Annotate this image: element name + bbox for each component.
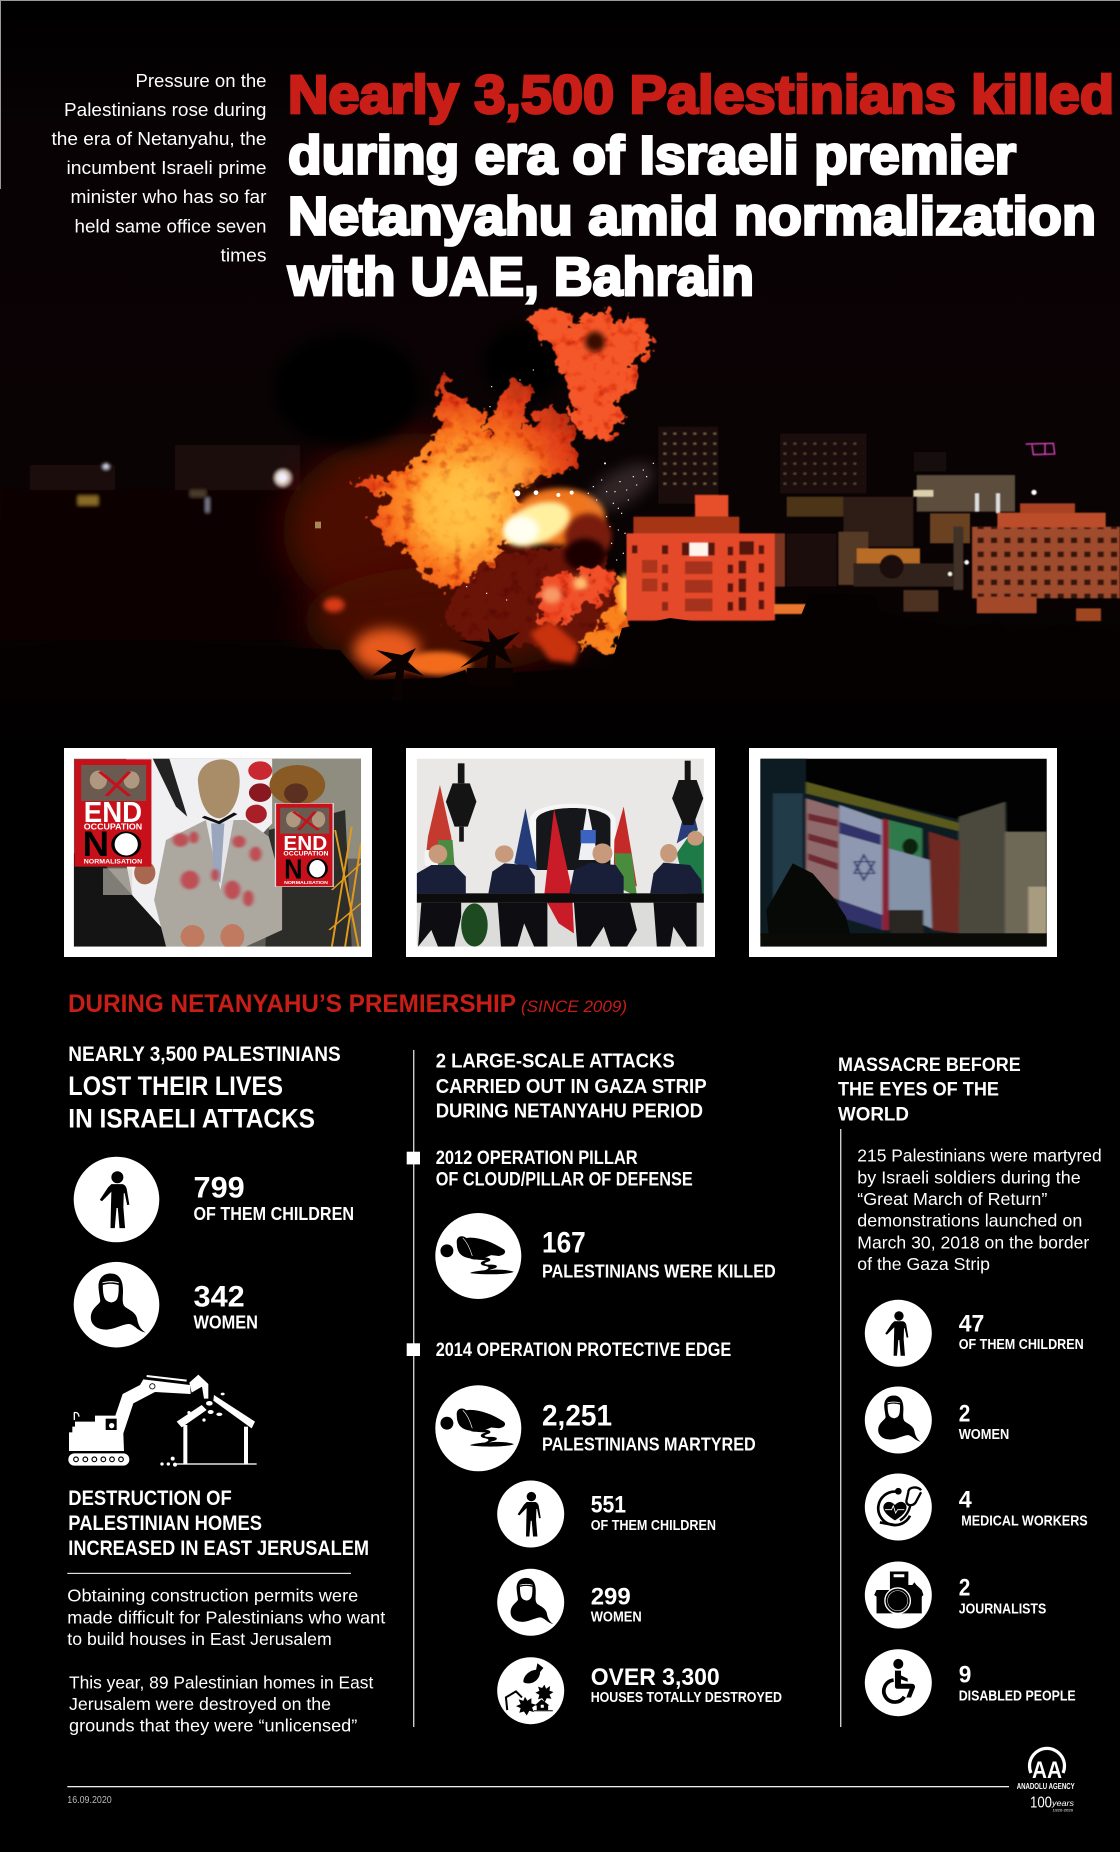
stat: houses destroyed: HOUSES TOTALLY DESTROYED xyxy=(591,1690,782,1706)
text block: Great March of Return: of the Gaza Strip xyxy=(857,1254,990,1274)
burning building xyxy=(627,533,775,621)
stat: 551 children: OF THEM CHILDREN xyxy=(591,1518,716,1534)
photo: protest with Netanyahu mask xyxy=(64,748,372,957)
intro text: times xyxy=(220,246,266,266)
stat: 167 killed: 167 xyxy=(542,1227,586,1260)
heading xyxy=(68,1042,341,1134)
date: 16.09.2020 xyxy=(67,1794,112,1806)
stat: 2,251 martyred: 2,251 xyxy=(542,1399,612,1432)
palm silhouettes xyxy=(372,628,520,700)
city and burning building xyxy=(627,427,1120,621)
stat: women: WOMEN xyxy=(194,1313,258,1333)
heading: MASSACRE BEFORE xyxy=(838,1054,1021,1076)
title: Netanyahu amid normalization xyxy=(288,186,1096,246)
foreground silhouette xyxy=(0,593,1120,740)
photo: protest with Netanyahu mask: OCCUPATION xyxy=(84,822,142,831)
footer xyxy=(67,1748,1075,1813)
heading: NEARLY 3,500 PALESTINIANS xyxy=(68,1042,341,1066)
subheading: 2012 xyxy=(436,1148,693,1190)
photo: protest with Netanyahu mask: N xyxy=(82,824,109,864)
text block: permits: Jerusalem were destroyed on the xyxy=(69,1694,331,1714)
text block: permits: This year, 89 Palestinian homes in East xyxy=(69,1672,373,1692)
text block: Great March of Return: “Great March of Return” xyxy=(857,1189,1047,1209)
text block: permits xyxy=(67,1585,385,1736)
logo: Anadolu Agency: AA xyxy=(1032,1757,1062,1784)
heading: destruction of homes xyxy=(68,1487,369,1560)
title: with UAE, Bahrain xyxy=(287,247,754,307)
hero photo: explosion over Gaza at night xyxy=(0,0,1120,748)
stat: 167 killed xyxy=(435,1213,776,1299)
subheading: 2012: 2012 OPERATION PILLAR xyxy=(436,1148,638,1169)
stat: 299 women xyxy=(497,1569,642,1636)
photo: protest with Netanyahu mask: NORMALISATION xyxy=(284,880,328,885)
heading: THE EYES OF THE xyxy=(838,1079,999,1101)
logo: Anadolu Agency: 1920-2020 xyxy=(1053,1809,1073,1813)
stat: children: 799 xyxy=(194,1172,245,1205)
stat: 4 medical workers: MEDICAL WORKERS xyxy=(961,1513,1088,1529)
text block: Great March of Return: 215 Palestinians were martyred xyxy=(857,1145,1102,1165)
stat: 2,251 martyred: PALESTINIANS MARTYRED xyxy=(542,1434,756,1455)
photo: protest with Netanyahu mask: N xyxy=(284,854,303,885)
section heading: (SINCE 2009) xyxy=(521,997,627,1016)
stat: 2 journalists xyxy=(865,1562,1047,1628)
sparks xyxy=(466,369,671,613)
title: during era of Israeli premier xyxy=(288,126,1016,186)
text block: permits: made difficult for Palestinians who want xyxy=(67,1607,385,1627)
icon: excavator demolishing house xyxy=(68,1375,257,1467)
heading: WORLD xyxy=(838,1104,909,1126)
text block: Great March of Return xyxy=(857,1145,1102,1274)
intro text: incumbent Israeli prime xyxy=(66,158,266,178)
heading: destruction of homes: INCREASED IN EAST JERUSALEM xyxy=(68,1537,369,1560)
heading xyxy=(436,1051,707,1123)
stat: children: OF THEM CHILDREN xyxy=(194,1204,354,1224)
logo: Anadolu Agency: ANADOLU AGENCY xyxy=(1017,1781,1075,1791)
stat: 9 disabled people: DISABLED PEOPLE xyxy=(959,1689,1076,1705)
stat: 4 medical workers xyxy=(865,1474,1088,1540)
photo: protest with Netanyahu mask: END xyxy=(283,832,327,854)
pink sign xyxy=(1026,443,1055,455)
subheading: 2012: OF CLOUD/PILLAR OF DEFENSE xyxy=(436,1169,693,1190)
logo: Anadolu Agency xyxy=(1017,1748,1075,1813)
logo: Anadolu Agency: 100 xyxy=(1030,1794,1052,1812)
stat: 9 disabled people xyxy=(865,1649,1076,1716)
heading: CARRIED OUT IN GAZA STRIP xyxy=(436,1076,707,1098)
title xyxy=(287,65,1114,307)
heading: DURING NETANYAHU PERIOD xyxy=(436,1101,703,1123)
stat: houses destroyed: OVER 3,300 xyxy=(591,1664,720,1691)
section heading: DURING NETANYAHU’S PREMIERSHIP xyxy=(68,990,516,1018)
panel: killed overall xyxy=(67,1042,385,1736)
photo: flags projected on Jerusalem wall xyxy=(749,748,1057,957)
heading: destruction of homes: PALESTINIAN HOMES xyxy=(68,1512,262,1535)
stat: 299 women: 299 xyxy=(591,1583,631,1610)
stat: 47 children xyxy=(865,1300,1084,1367)
stat: 167 killed: PALESTINIANS WERE KILLED xyxy=(542,1261,776,1282)
stat: 2 women xyxy=(865,1386,1009,1454)
title: Nearly 3,500 Palestinians killed xyxy=(288,65,1114,125)
photo: protest with Netanyahu mask: NORMALISATION xyxy=(84,858,142,865)
stat: 2 women: WOMEN xyxy=(959,1427,1009,1443)
text block: Great March of Return: by Israeli soldiers during the xyxy=(857,1167,1081,1187)
text block: Great March of Return: demonstrations launched on xyxy=(857,1211,1082,1231)
stat: 2 journalists: 2 xyxy=(959,1575,970,1602)
intro text: minister who has so far xyxy=(70,187,266,207)
text block: permits: to build houses in East Jerusalem xyxy=(67,1629,332,1649)
text block: permits: Obtaining construction permits were xyxy=(67,1585,358,1605)
heading: 2 LARGE-SCALE ATTACKS xyxy=(436,1051,675,1073)
photo: protest with Netanyahu mask: END xyxy=(84,797,142,828)
stat: 4 medical workers: 4 xyxy=(959,1487,972,1514)
photo: signing ceremony xyxy=(406,748,715,957)
stat: children xyxy=(74,1157,354,1242)
subheading: 2014: 2014 OPERATION PROTECTIVE EDGE xyxy=(436,1340,731,1361)
photo: protest with Netanyahu mask: OCCUPATION xyxy=(283,850,329,857)
heading: IN ISRAELI ATTACKS xyxy=(68,1104,315,1134)
fire plume and fireball xyxy=(273,307,671,675)
stat: 299 women: WOMEN xyxy=(591,1609,642,1625)
logo: Anadolu Agency: years xyxy=(1051,1798,1075,1808)
intro text: Palestinians rose during xyxy=(64,100,266,120)
left city skyline xyxy=(0,445,300,640)
stat: 47 children: 47 xyxy=(959,1311,984,1338)
intro text xyxy=(52,71,266,266)
stat: women: 342 xyxy=(194,1281,245,1314)
stat: 2,251 martyred xyxy=(435,1385,756,1471)
stat: 9 disabled people: 9 xyxy=(959,1662,971,1689)
text block: permits: grounds that they were “unlicensed” xyxy=(69,1716,357,1736)
intro text: held same office seven xyxy=(74,216,266,236)
heading: destruction of homes: DESTRUCTION OF xyxy=(68,1487,232,1510)
stat: 2 women: 2 xyxy=(959,1401,970,1428)
intro text: Pressure on the xyxy=(136,71,266,91)
stat: 2 journalists: JOURNALISTS xyxy=(959,1601,1047,1617)
right building xyxy=(972,527,1120,598)
panel: massacre before the eyes of the world xyxy=(838,1054,1102,1727)
text block: Great March of Return: March 30, 2018 on the border xyxy=(857,1232,1089,1252)
panel: large-scale attacks xyxy=(407,1050,782,1727)
stat: 551 children: 551 xyxy=(591,1492,626,1519)
heading: LOST THEIR LIVES xyxy=(68,1071,283,1101)
stat: 47 children: OF THEM CHILDREN xyxy=(959,1337,1084,1353)
stat: houses destroyed xyxy=(497,1657,782,1724)
intro text: the era of Netanyahu, the xyxy=(52,129,266,149)
stat: women xyxy=(74,1262,258,1348)
stat: 551 children xyxy=(497,1480,716,1548)
border lines xyxy=(0,0,1120,189)
heading xyxy=(838,1054,1021,1126)
